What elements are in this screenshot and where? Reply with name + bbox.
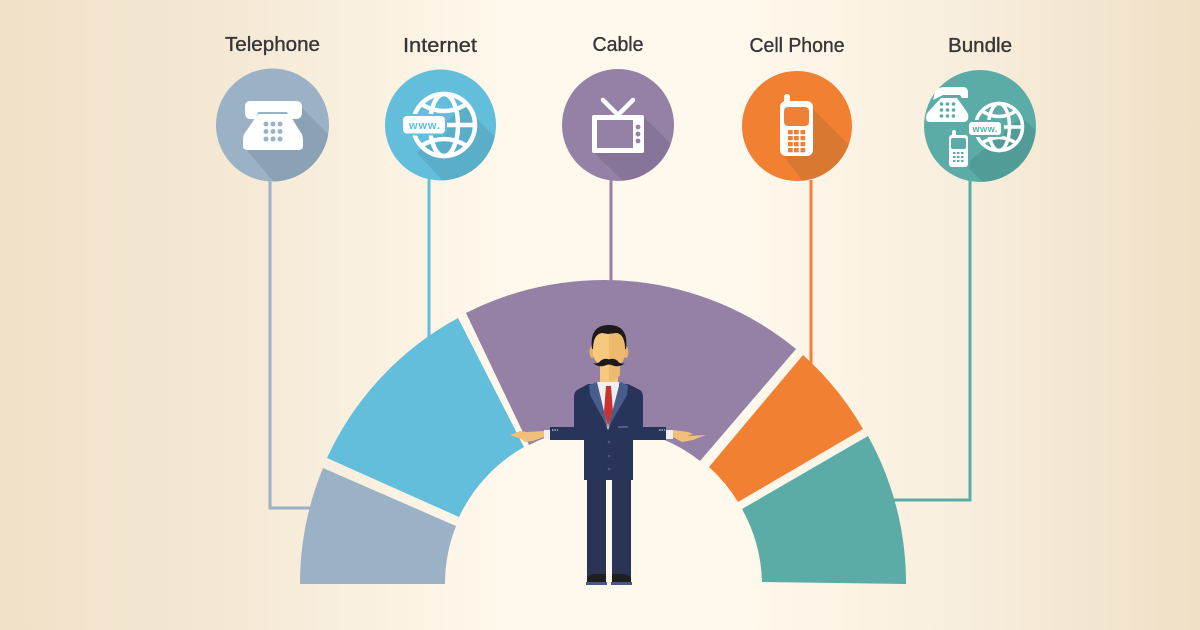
hair (592, 325, 626, 349)
icon: television (562, 69, 674, 181)
connector: telephone (270, 180, 312, 508)
segment: cell phone (709, 355, 863, 502)
label: Telephone: Telephone (225, 34, 320, 56)
cuffs (544, 430, 550, 439)
tie (604, 386, 613, 426)
segment: cable (466, 280, 796, 461)
shoes (586, 574, 632, 585)
neck (600, 370, 618, 384)
segment: bundle (742, 436, 906, 584)
segment: internet (327, 318, 524, 517)
connector: cable (610, 180, 612, 285)
icon: bundle (924, 70, 1036, 182)
icon: cell phone (742, 71, 852, 181)
label: Cable: Cable (592, 34, 644, 56)
icon: internet globe: www. (408, 120, 440, 132)
face (593, 333, 625, 381)
icon: internet globe (385, 70, 496, 180)
moustache (595, 359, 623, 366)
cuff buttons (552, 429, 665, 431)
lapels (589, 382, 608, 428)
buttons (608, 441, 610, 443)
connector: cell phone (810, 180, 812, 370)
label: Internet: Internet (403, 35, 477, 57)
icon: bundle: www. (972, 124, 998, 134)
figure: businessman (510, 325, 706, 585)
right leg (612, 478, 631, 582)
label: Cell Phone: Cell Phone (750, 35, 844, 57)
label: Bundle: Bundle (948, 35, 1012, 57)
semicircle chart (300, 280, 906, 584)
shirt (597, 382, 619, 430)
segment: telephone (300, 468, 456, 584)
icon: telephone (216, 68, 329, 182)
connector: internet (428, 178, 430, 340)
right hand (673, 430, 706, 442)
left leg (587, 478, 606, 582)
sleeves and jacket (550, 384, 666, 480)
ears (590, 346, 594, 358)
connector: bundle (890, 180, 970, 500)
left hand (510, 431, 544, 442)
